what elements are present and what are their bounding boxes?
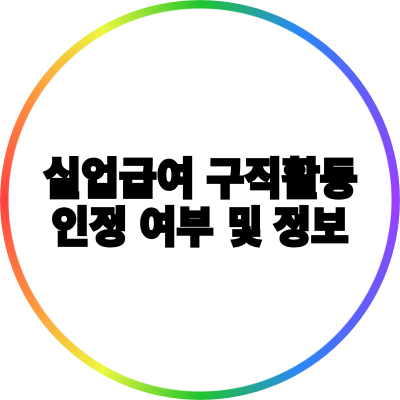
- title line 2: [52, 204, 348, 251]
- title line 2: 및: [228, 204, 262, 251]
- title line 2: 여부: [140, 204, 214, 251]
- title line 1: [44, 156, 358, 204]
- title line 1: 실업급여: [44, 156, 194, 204]
- title line 1: 구직활동: [206, 156, 358, 204]
- title line 2: 정보: [274, 204, 348, 251]
- title line 2: 인정: [52, 204, 128, 251]
